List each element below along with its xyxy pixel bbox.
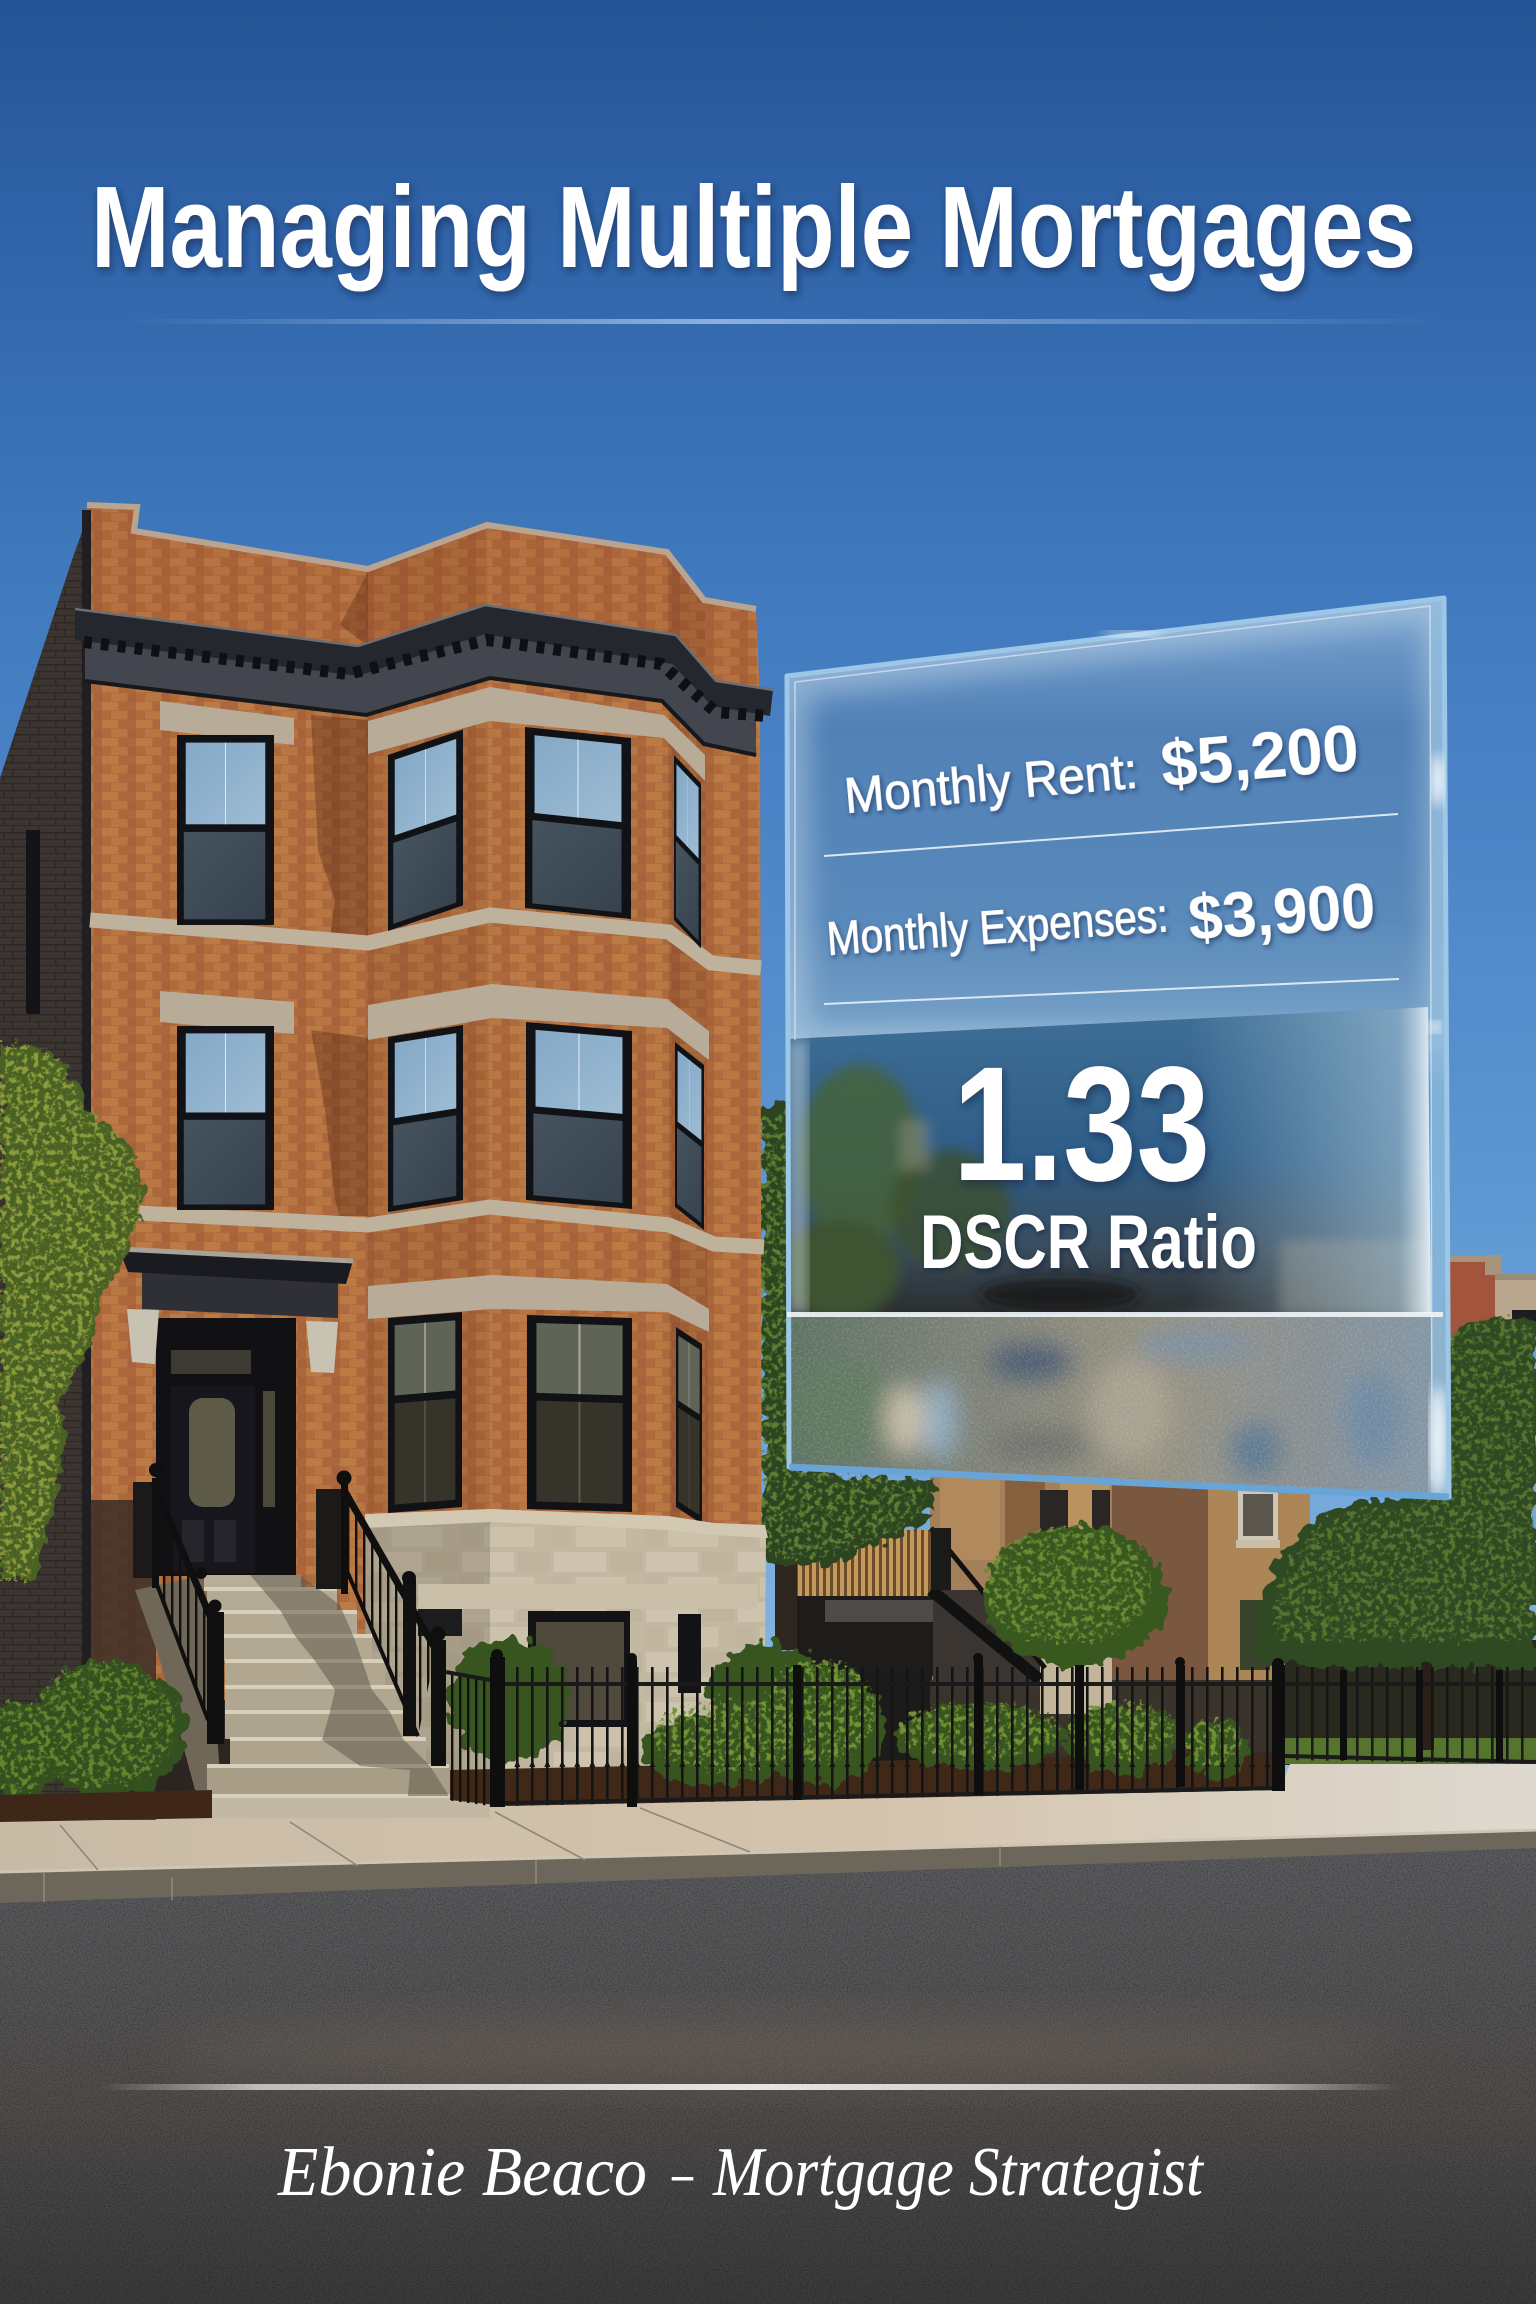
blurred scene behind frost: [790, 1327, 1401, 1478]
fence rails: [446, 1672, 1536, 1803]
stair railings: [133, 1463, 446, 1766]
inner frame line: [795, 606, 1432, 1480]
stair cheek wall: [135, 1575, 222, 1800]
far brick building: [1450, 1255, 1536, 1338]
door pediment: [119, 1249, 353, 1373]
DSCR value: 1.33: [953, 1032, 1210, 1215]
row: monthly expenses: Monthly Expenses:: [825, 888, 1170, 965]
footer divider: [100, 2084, 1400, 2090]
footer byline: –: [671, 2134, 694, 2211]
stone belt courses: [90, 915, 764, 1247]
left background tree: [762, 1100, 935, 1650]
left bright fade: [788, 1040, 808, 1315]
panel glass body: [780, 590, 1460, 1497]
frost grain: [788, 1316, 1449, 1497]
fence pickets: [446, 1672, 490, 1806]
shrubs behind fence: [448, 1638, 1248, 1786]
background neighbourhood: [762, 1100, 1536, 1795]
curb: [0, 1830, 1536, 1903]
footer byline: Mortgage Strategist: [712, 2134, 1204, 2211]
wall shadow: [311, 715, 368, 936]
divider two: [824, 979, 1399, 1004]
facade shading: [368, 525, 490, 1515]
round shrub: [984, 1526, 1168, 1666]
side wall: [0, 509, 92, 1810]
dark glass section: [788, 1007, 1431, 1314]
foreground shrubs: [0, 1638, 1280, 1822]
front left tree: [0, 1044, 144, 1580]
row: monthly rent: $5,200: [1158, 710, 1361, 801]
road light patch: [160, 2018, 1400, 2082]
right glow in dark section: [1203, 1007, 1431, 1314]
brick facade: [87, 503, 762, 1700]
lower entry shade: [90, 1500, 156, 1820]
frosted lower section: [788, 1316, 1449, 1497]
right railing: [316, 1470, 446, 1766]
sidewalk: [0, 1764, 1536, 1872]
cornice dentils: [84, 640, 766, 716]
row: monthly expenses: [825, 869, 1378, 965]
parapet tint: [87, 503, 756, 690]
panel frame: [787, 598, 1449, 1497]
footer byline: Ebonie Beaco: [277, 2134, 647, 2211]
bottom glass edge: [789, 1467, 1449, 1497]
road grain: [0, 1825, 1536, 2304]
windows second row: [177, 1022, 704, 1230]
row: monthly expenses: $3,900: [1186, 869, 1378, 954]
iron fence: [446, 1649, 1536, 1807]
title divider: [120, 319, 1450, 324]
windows third row: [388, 1312, 702, 1524]
footer byline: [277, 2134, 1204, 2211]
stone lintels: [160, 687, 709, 1332]
sidewalk, curb and road: [0, 1764, 1536, 2304]
windows first row: [177, 727, 701, 948]
entry door: [156, 1318, 296, 1576]
cornice frieze: [85, 628, 756, 755]
cornice cap: [75, 605, 773, 716]
left railing: [133, 1463, 224, 1744]
glints: [1100, 631, 1444, 1033]
shrubs left of stairs: [0, 1662, 188, 1800]
background balcony and stair: [795, 1528, 1112, 1714]
fence posts: [490, 1649, 1503, 1807]
side wall window: [26, 830, 40, 1014]
reflection of tree: [780, 1065, 1430, 1320]
stair shadows: [250, 1575, 449, 1796]
stair treads: [204, 1575, 490, 1818]
shadowed lower wall: [90, 1560, 370, 1810]
parapet cap: [87, 505, 756, 609]
upper glass: [780, 590, 1460, 1050]
main brick building: [0, 503, 773, 1820]
glass DSCR panel: [780, 590, 1460, 1497]
divider one: [824, 814, 1398, 856]
right background tree: [1255, 1317, 1536, 1750]
mulch beds: [0, 1752, 1280, 1822]
ground floor shadow behind fence: [762, 1640, 1536, 1795]
row: monthly rent: Monthly Rent:: [842, 743, 1140, 824]
glass side edge: [1430, 601, 1446, 1494]
rusticated stone base: [365, 1509, 768, 1800]
section divider white line: [787, 1312, 1443, 1317]
frosted inner edge: [787, 598, 1449, 1050]
DSCR label: DSCR Ratio: [920, 1200, 1257, 1285]
entry stairs: [135, 1575, 490, 1818]
road: [0, 1825, 1536, 2304]
tan apartment building: [930, 1470, 1310, 1720]
row: monthly rent: [842, 710, 1361, 824]
